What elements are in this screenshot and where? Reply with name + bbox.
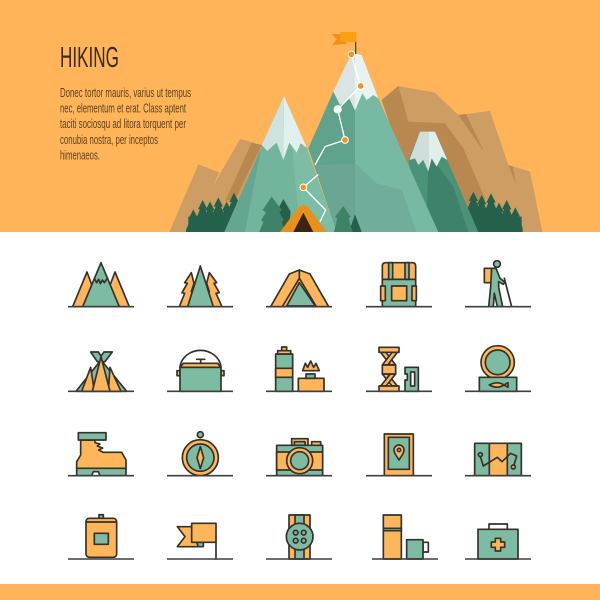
intro text block (60, 86, 191, 162)
icon: trail map (475, 443, 521, 476)
icon: flag (177, 523, 216, 559)
icon: cooking pot (177, 350, 224, 391)
icon: hiker (484, 261, 512, 307)
icon: compass (182, 432, 218, 476)
left brown cliffs (169, 139, 262, 232)
icon: backpack (381, 263, 416, 307)
icon: mirror with fish plaque (479, 346, 517, 391)
intro text block: taciti sociosqu ad litora torquent per (60, 117, 186, 131)
bottom orange strip (0, 584, 600, 600)
icon: pine trees (179, 266, 222, 307)
icon: first aid kit (478, 524, 518, 559)
right pine cluster (468, 192, 523, 232)
icon baselines (68, 307, 531, 559)
icon: mountains (73, 263, 129, 307)
front pines (259, 197, 362, 232)
intro text block: nec, elementum et erat. Class aptent (60, 102, 186, 116)
title: HIKING (60, 42, 119, 74)
summit flag (332, 32, 356, 54)
mountain illustration (169, 32, 542, 253)
right brown cliffs (382, 86, 542, 232)
icon: hiking boot (77, 433, 126, 476)
left pine cluster (186, 192, 238, 232)
icon: tent (271, 270, 329, 307)
intro text block: Donec tortor mauris, varius ut tempus (60, 86, 191, 100)
icon: thermos and cup (383, 515, 428, 559)
icon: camera (277, 439, 323, 476)
icon: GPS device (384, 434, 413, 476)
main mountain (308, 53, 438, 232)
icon: wristwatch (286, 515, 313, 559)
icon: food can (86, 515, 117, 557)
orange header background (0, 0, 600, 232)
route line (303, 54, 361, 222)
left mountain (224, 96, 337, 232)
route markers (300, 51, 364, 191)
small snowy mountain (408, 132, 478, 232)
intro text block: conubia nostra, per inceptos (60, 133, 158, 147)
intro text block: himenaeos. (60, 148, 100, 162)
icon: tipi (76, 352, 127, 391)
base camp tent (280, 204, 327, 232)
icon: gas canister and stove (276, 347, 324, 391)
icon: folding stool and tool (379, 347, 418, 391)
